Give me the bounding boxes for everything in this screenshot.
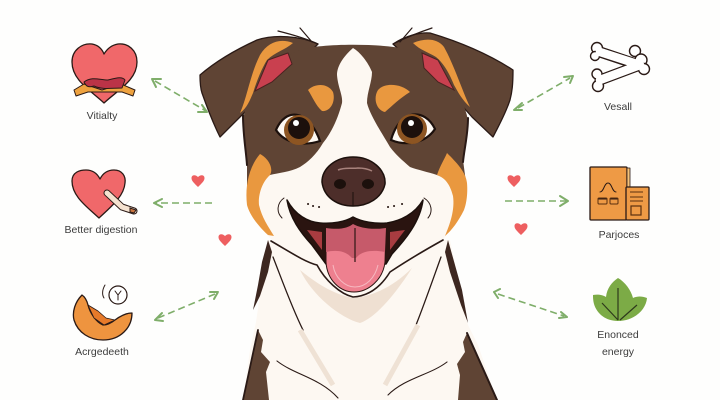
icon: melon slice with coin bbox=[73, 285, 132, 340]
icon: green leaves bbox=[593, 278, 647, 321]
right cheek patch bbox=[437, 153, 467, 236]
arrow: middle-right link bbox=[505, 196, 568, 206]
arrow: upper-right link bbox=[514, 76, 573, 110]
arrow: digestion link bbox=[154, 199, 212, 207]
mouth bbox=[271, 200, 443, 297]
right ear bbox=[393, 28, 513, 137]
smile creases bbox=[278, 198, 431, 218]
white blaze and muzzle bbox=[250, 48, 465, 297]
label: Parjoces: Parjoces bbox=[599, 229, 639, 241]
icon: heart with bone bbox=[72, 170, 136, 218]
heart right upper bbox=[508, 175, 520, 187]
heart right lower bbox=[514, 223, 528, 235]
arrow: vitality link bbox=[152, 79, 207, 112]
arrow: lower-right link bbox=[494, 289, 567, 318]
right eyebrow bbox=[376, 85, 410, 112]
label: Enonced energy: energy bbox=[602, 346, 635, 358]
dark side fur bbox=[243, 115, 468, 165]
icon: heart with ribbon bbox=[72, 44, 137, 103]
icon: orange folder documents bbox=[590, 167, 649, 220]
left cheek patch bbox=[246, 154, 274, 236]
nose bbox=[322, 157, 385, 206]
left ear bbox=[200, 28, 318, 137]
label: Aregedeeth: Acrgedeeth bbox=[75, 346, 129, 358]
arrow: lower-left link bbox=[155, 292, 218, 321]
right inner ear bbox=[413, 40, 470, 107]
icon: crossed bones bbox=[590, 42, 650, 92]
heart left lower bbox=[218, 234, 232, 246]
hearts bbox=[192, 175, 528, 246]
left eye bbox=[276, 115, 320, 145]
heart left upper bbox=[192, 175, 204, 187]
label: Enonced energy: Enonced bbox=[597, 329, 639, 341]
head bbox=[240, 40, 470, 297]
dog body bbox=[243, 240, 497, 400]
illustration: dog bbox=[200, 28, 513, 400]
label: Better digestion: Better digestion bbox=[65, 224, 138, 236]
label: Vesall: Vesall bbox=[604, 101, 632, 113]
left inner ear bbox=[240, 41, 293, 113]
right eye bbox=[391, 114, 435, 144]
left eyebrow bbox=[308, 85, 334, 111]
label: Vitiality: Vitialty bbox=[87, 110, 118, 122]
